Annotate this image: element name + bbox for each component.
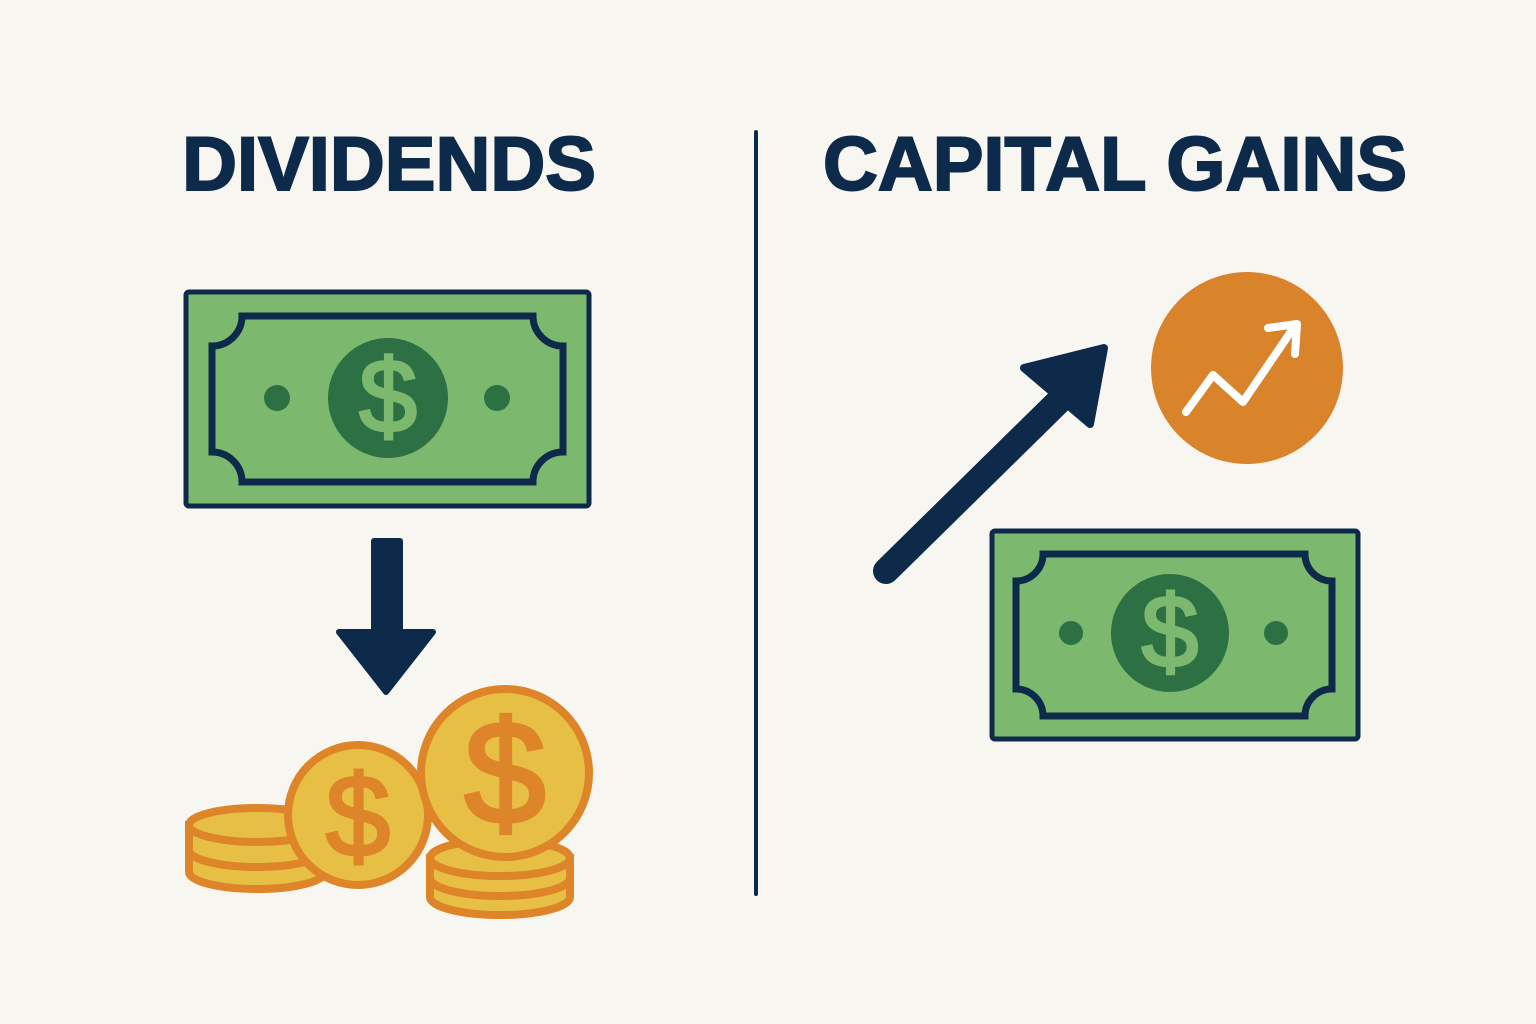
icon: dividend bill	[186, 292, 589, 506]
icon: coins: $	[326, 751, 390, 881]
icon: capital gains bill: $	[1142, 575, 1198, 689]
arrow: up-right	[886, 348, 1104, 571]
arrow: down	[339, 541, 433, 692]
title: capital gains: CAPITAL GAINS	[823, 122, 1407, 207]
icon: coins: $	[464, 691, 546, 854]
icon: capital gains bill	[992, 531, 1358, 739]
icon: dividend bill: $	[359, 339, 417, 455]
icon: coins	[189, 689, 589, 915]
title: dividends: DIVIDENDS	[182, 122, 596, 207]
divider	[754, 130, 758, 896]
icon: growth circle	[1151, 272, 1343, 464]
